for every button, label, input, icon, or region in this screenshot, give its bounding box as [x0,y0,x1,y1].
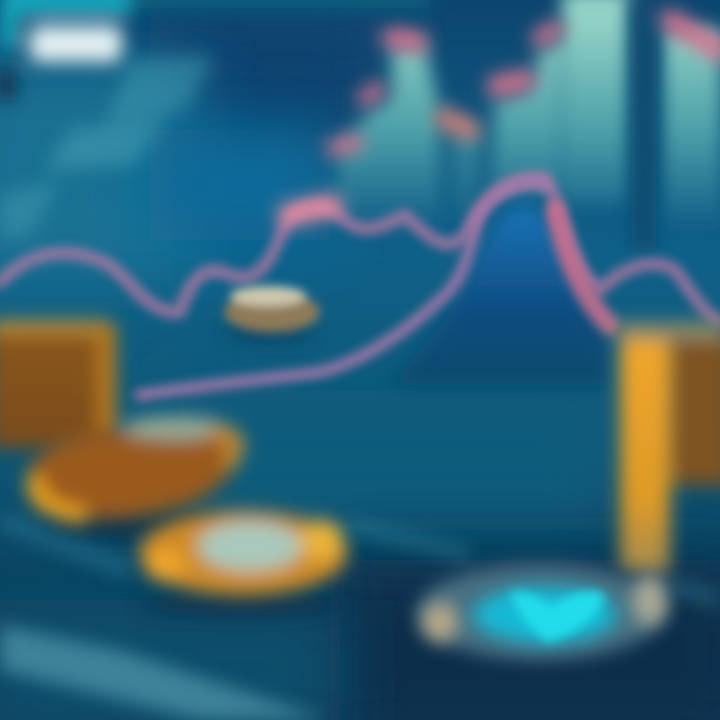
pink bar tops [335,20,720,148]
pink trend lines [0,178,720,395]
faint background grid panel [0,55,215,240]
gold bar stack right [615,322,720,572]
floating small coin [224,286,320,332]
cyan glowing dish [418,564,668,660]
gold coin front [139,511,347,595]
gold coin stack left [0,320,116,448]
top-left light panel [0,0,430,100]
floor highlight stripes [0,520,720,720]
coin shadows [40,324,340,616]
gold coin middle [27,416,242,519]
bar chart [332,0,720,250]
blue hill under trend line [390,205,610,385]
